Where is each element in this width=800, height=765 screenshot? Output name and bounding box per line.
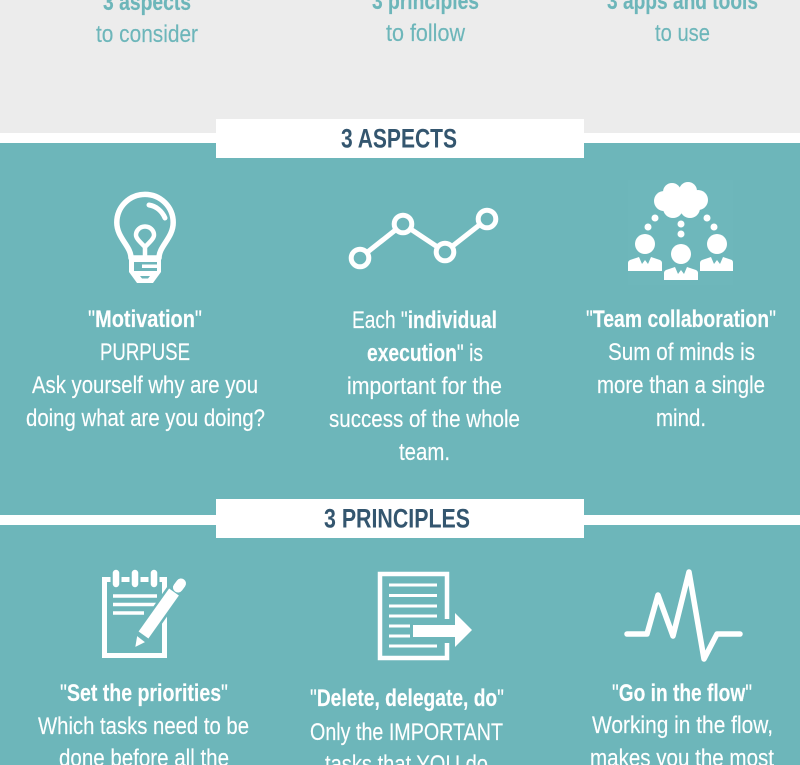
- text: delete, delegate, do: Only the IMPORTANT: [310, 719, 503, 746]
- text: team collaboration: Sum of minds is: [608, 339, 755, 366]
- text: go in the flow: Working in the flow,: [592, 712, 773, 739]
- heading: 3 aspects: 3 ASPECTS: [341, 124, 457, 154]
- text: individual execution: team.: [399, 439, 450, 466]
- text: set the priorities: [38, 680, 249, 765]
- text: motivation: [26, 306, 265, 432]
- heading: 3 principles: 3 PRINCIPLES: [324, 504, 470, 534]
- text: set the priorities: Which tasks need to be: [38, 713, 249, 740]
- icon: document with arrow: [380, 574, 472, 658]
- text: individual execution: success of the whole: [329, 406, 520, 433]
- icon: team collaboration: [628, 180, 733, 285]
- text: delete, delegate, do: [310, 685, 504, 765]
- icon: notepad and pencil: [104, 573, 181, 656]
- icon: light bulb: [117, 194, 173, 283]
- heading: 3 aspects: [0, 119, 800, 158]
- panel: intro: [0, 0, 800, 133]
- text: team collaboration: more than a single: [597, 372, 765, 399]
- icon: line chart: [351, 210, 496, 267]
- text: set the priorities: "Set the priorities": [60, 680, 228, 707]
- text: go in the flow: [590, 680, 774, 765]
- text: motivation: doing what are you doing?: [26, 405, 265, 432]
- intro column: principles: [372, 0, 479, 47]
- text: team collaboration: [586, 306, 776, 432]
- text: individual execution: Each "individual: [352, 307, 497, 334]
- heading: 3 principles: [0, 499, 800, 538]
- intro column: apps and tools: to use: [655, 20, 710, 47]
- text: motivation: "Motivation": [88, 306, 202, 333]
- text: individual execution: execution" is: [367, 340, 483, 367]
- text: go in the flow: "Go in the flow": [612, 680, 752, 707]
- panel: 3 aspects: [0, 119, 800, 515]
- intro column: apps and tools: [607, 0, 758, 47]
- text: motivation: Ask yourself why are you: [32, 372, 258, 399]
- intro column: aspects: to consider: [96, 21, 198, 48]
- text: delete, delegate, do: "Delete, delegate, do": [310, 685, 504, 712]
- intro column: aspects: [96, 0, 198, 48]
- icon: pulse line: [627, 572, 740, 659]
- intro column: principles: to follow: [386, 20, 466, 47]
- text: individual execution: [329, 307, 520, 466]
- text: motivation: PURPUSE: [100, 339, 190, 366]
- panel: 3 principles: [0, 499, 800, 765]
- text: individual execution: important for the: [347, 373, 502, 400]
- text: team collaboration: mind.: [656, 405, 706, 432]
